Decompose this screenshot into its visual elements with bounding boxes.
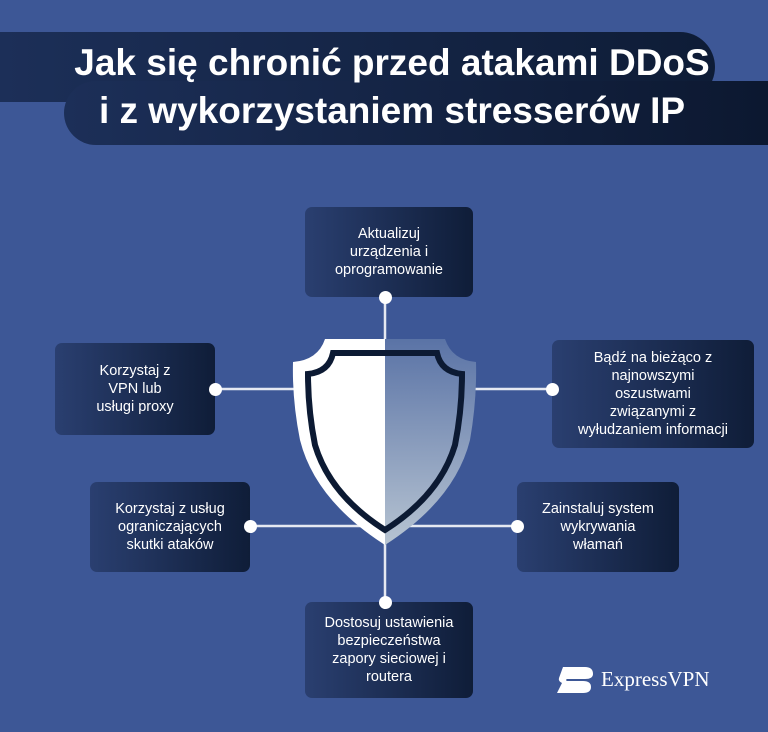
box: left2: Korzystaj z usług bbox=[115, 501, 225, 517]
dots bbox=[209, 291, 559, 609]
box: right1 bbox=[552, 340, 754, 448]
title: i z wykorzystaniem stresserów IP bbox=[99, 90, 685, 131]
box: left2 bbox=[90, 482, 250, 572]
box: right2: włamań bbox=[573, 537, 623, 553]
logo bbox=[557, 667, 710, 693]
box: top: Aktualizuj bbox=[358, 226, 420, 242]
box: bottom: bezpieczeństwa bbox=[337, 633, 441, 649]
box: left2: skutki ataków bbox=[126, 537, 214, 553]
box: bottom: routera bbox=[366, 669, 412, 685]
box: left1: usługi proxy bbox=[96, 399, 174, 415]
box: left1 bbox=[55, 343, 215, 435]
box: left1: VPN lub bbox=[108, 381, 162, 397]
title: Jak się chronić przed atakami DDoS bbox=[74, 42, 710, 83]
box: right2 bbox=[517, 482, 679, 572]
logo: ExpressVPN bbox=[601, 667, 710, 691]
box: top bbox=[305, 207, 473, 297]
title bbox=[0, 32, 768, 145]
box: left2: ograniczających bbox=[118, 519, 222, 535]
box: right1: Bądź na bieżąco z bbox=[594, 350, 712, 366]
box: left1: Korzystaj z bbox=[100, 363, 170, 379]
box: top: urządzenia i bbox=[350, 244, 428, 260]
box: top: oprogramowanie bbox=[335, 262, 443, 278]
box: right1: najnowszymi bbox=[611, 368, 694, 384]
box: right1: związanymi z bbox=[610, 404, 696, 420]
box: right1: oszustwami bbox=[615, 386, 691, 402]
box: bottom: zapory sieciowej i bbox=[332, 651, 446, 667]
box: right2: Zainstaluj system bbox=[542, 501, 654, 517]
box: right1: wyłudzaniem informacji bbox=[578, 422, 728, 438]
box: right2: wykrywania bbox=[561, 519, 635, 535]
box: bottom bbox=[305, 602, 473, 698]
box: bottom: Dostosuj ustawienia bbox=[325, 615, 453, 631]
